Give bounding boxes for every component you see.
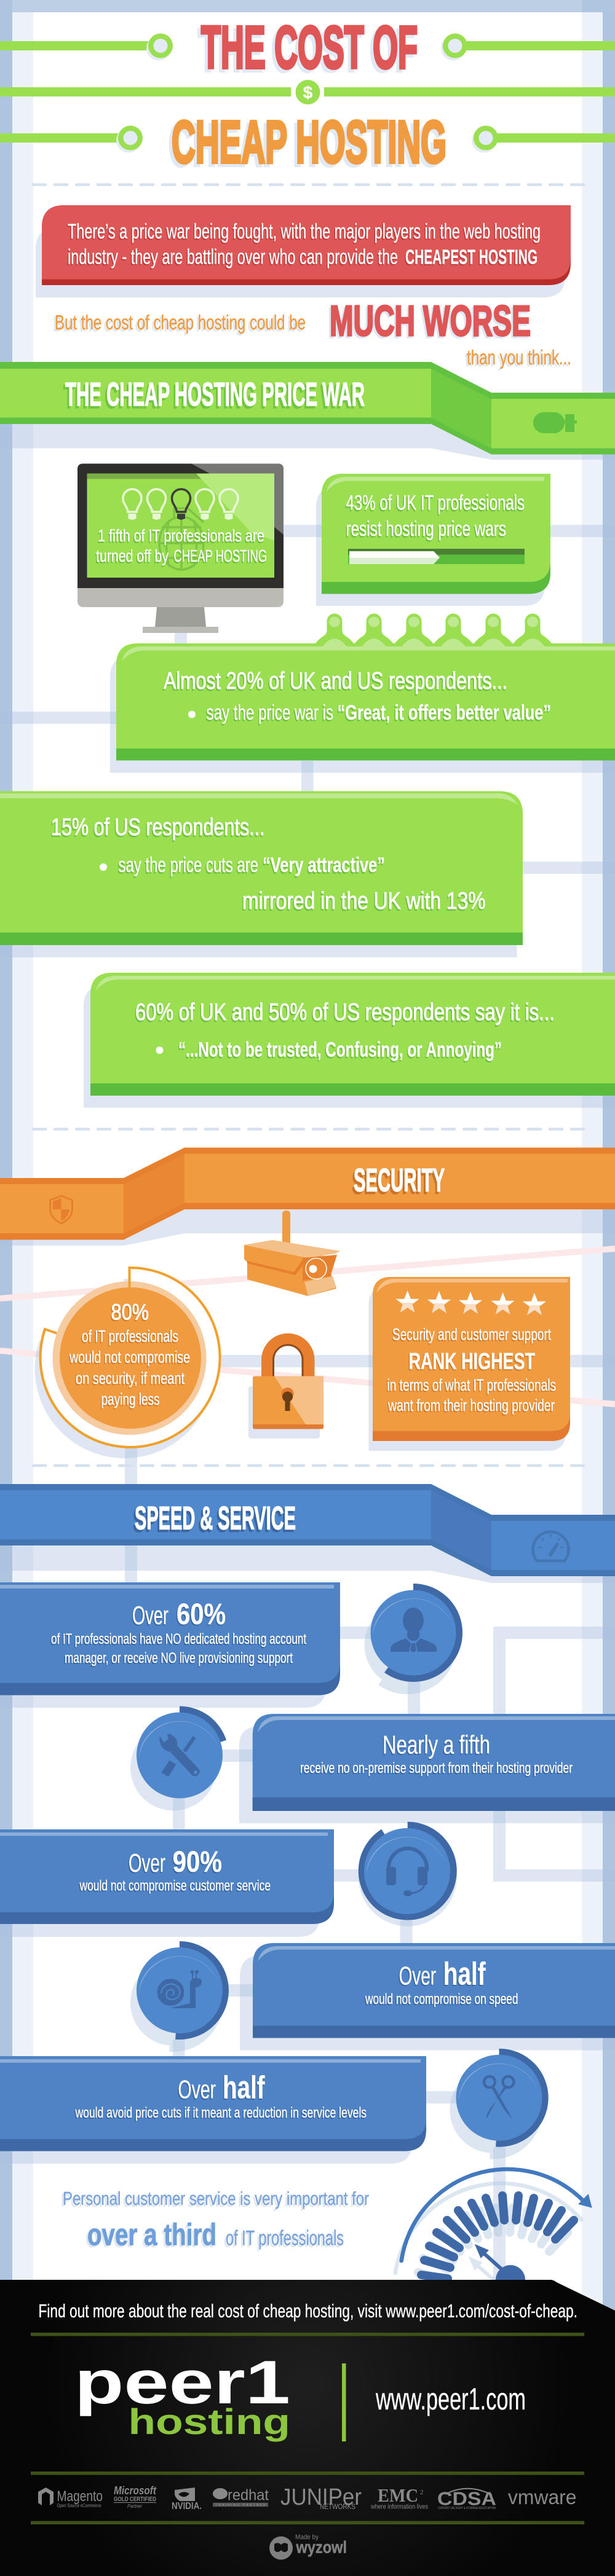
scissors symbol — [484, 2076, 514, 2119]
logo: red hat: redhat — [228, 2487, 269, 2504]
panel text: would avoid price cuts if it meant a reduction in service levels — [75, 2105, 367, 2121]
made by wyzowl — [269, 2534, 347, 2560]
partner logos — [38, 2484, 577, 2511]
panel: almost 20 percent — [110, 638, 615, 773]
icon badge: account manager — [364, 1584, 462, 1694]
panel text: “Very attractive” — [263, 854, 385, 877]
panel text: Over — [132, 1601, 169, 1630]
banner: the cheap hosting price war — [0, 362, 615, 460]
logo: microsoft gold certified: Partner — [127, 2503, 142, 2509]
background circuit lines — [0, 525, 615, 2280]
panel text: mirrored in the UK with 13% — [242, 888, 486, 914]
icon badge: snail — [130, 1941, 229, 2052]
large speed dial gauge — [395, 2169, 592, 2295]
laser beams — [0, 1249, 615, 1404]
intro text — [68, 220, 541, 269]
logo: red hat: TRAINING PARTNER — [215, 2503, 266, 2507]
panel: 15 percent of US respondents — [0, 791, 523, 957]
gauge arc with arrow — [402, 2169, 592, 2261]
panel text — [300, 1730, 573, 1777]
panel text: half — [223, 2070, 265, 2105]
dial text: on security, if meant — [76, 1369, 184, 1388]
logo: magento: Magento — [57, 2488, 103, 2505]
panel text: manager, or receive NO live provisioning support — [65, 1650, 293, 1667]
progress bar 43 percent — [348, 549, 525, 564]
panel text: would not compromise customer service — [79, 1878, 271, 1894]
gauge ticks — [421, 2196, 574, 2279]
gauge needle — [475, 2244, 525, 2295]
monitor screen — [87, 473, 274, 578]
panel text — [164, 668, 551, 724]
panel: over 60 percent — [0, 1582, 340, 1708]
panel: 43 percent resist price wars — [316, 474, 550, 606]
panel text — [51, 814, 486, 914]
intro text: industry - they are battling over who can provide the — [68, 246, 398, 269]
circle: 80 percent would not compromise — [35, 1268, 220, 1458]
dial text: paying less — [101, 1390, 160, 1408]
monitor: one fifth turned off by cheap hosting — [77, 463, 284, 633]
panel text: would not compromise on speed — [365, 1991, 518, 2008]
logo: peer1 hosting: peer1 — [74, 2348, 290, 2417]
panel text: Security and customer support — [392, 1325, 551, 1344]
crowd of people icons — [315, 613, 552, 644]
text: personal customer service — [63, 2188, 369, 2252]
icon: speedometer — [533, 1532, 568, 1561]
panel: over 90 percent — [0, 1829, 334, 1937]
text: but the cost could be much worse: than you think... — [467, 346, 571, 369]
dial text: would not compromise — [69, 1348, 190, 1367]
icon badge: scissors — [450, 2049, 549, 2159]
logo: nvidia — [172, 2488, 202, 2511]
title: the cost of cheap hosting — [0, 14, 615, 176]
panel text — [79, 1846, 271, 1894]
panel: security and support rank highest — [369, 1277, 570, 1451]
panel text — [51, 1598, 306, 1667]
text: but the cost could be much worse — [55, 297, 571, 369]
text: but the cost could be much worse: But the cost of cheap hosting could be — [55, 311, 306, 334]
panel text — [387, 1325, 556, 1415]
monitor text — [96, 526, 267, 565]
dial text — [69, 1299, 190, 1408]
footer url: www.peer1.com — [375, 2382, 526, 2416]
logo: microsoft gold certified: GOLD CERTIFIED — [114, 2496, 156, 2503]
dial ring — [41, 1268, 220, 1447]
icon: security camera — [244, 1211, 341, 1296]
footer — [0, 2280, 615, 2576]
panel: intro price war callout — [36, 205, 571, 297]
logo: juniper networks: NETWORKS — [320, 2502, 355, 2511]
banner heading: THE CHEAP HOSTING PRICE WAR — [65, 376, 365, 413]
monitor text: turned off by — [96, 546, 169, 565]
dial shadow — [35, 1279, 215, 1458]
panel text: of IT professionals have NO dedicated hosting account — [51, 1631, 306, 1647]
icon: shield — [50, 1196, 73, 1223]
snail symbol — [157, 1970, 202, 2008]
made by wyzowl: Made by — [295, 2534, 319, 2541]
panel text: RANK HIGHEST — [408, 1349, 535, 1375]
panel text: Almost 20% of UK and US respondents... — [164, 668, 507, 694]
title line one: THE COST OF — [201, 14, 418, 81]
logo: microsoft gold certified — [114, 2484, 157, 2509]
logo: peer1 hosting: hosting — [128, 2402, 290, 2442]
panel: 60 percent UK 50 percent US — [84, 973, 615, 1108]
panel text: Over — [399, 1961, 436, 1990]
panel text: Nearly a fifth — [383, 1730, 490, 1759]
panel text: say the price war is — [207, 701, 333, 724]
logo: magento — [38, 2488, 103, 2508]
panel text: 90% — [173, 1846, 222, 1879]
dial text: of IT professionals — [82, 1327, 178, 1346]
banner: security — [0, 1148, 615, 1246]
panel text: Over — [129, 1848, 165, 1877]
monitor body — [77, 463, 284, 607]
logo: nvidia: NVIDIA. — [172, 2501, 202, 2511]
icon: dollar coin: $ — [303, 83, 313, 102]
logo: emc: EMC — [378, 2484, 418, 2506]
logo: emc — [370, 2484, 428, 2510]
text: personal customer service: of IT professionals — [226, 2227, 344, 2250]
logo: vmware: vmware — [508, 2486, 577, 2508]
logo: peer1 hosting — [74, 2348, 290, 2442]
monitor text: CHEAP HOSTING — [173, 546, 267, 565]
panel text: 15% of US respondents... — [51, 814, 264, 841]
panel text: want from their hosting provider — [387, 1396, 555, 1415]
headset symbol — [386, 1848, 427, 1896]
panel: over half price cuts — [0, 2056, 426, 2164]
panel text — [135, 999, 555, 1062]
logo: emc: 2 — [420, 2489, 423, 2496]
lightbulbs — [123, 489, 238, 520]
text: personal customer service: over a third — [87, 2217, 216, 2252]
banner: speed and service — [0, 1484, 615, 1583]
logo: cdsa: CDSA — [437, 2488, 496, 2510]
five star rating — [396, 1290, 546, 1315]
dial text: 80% — [111, 1299, 149, 1325]
icon badge: headset — [359, 1822, 457, 1926]
watermark grenade — [159, 508, 204, 570]
panel text: say the price cuts are — [118, 854, 258, 877]
panel text: half — [443, 1957, 486, 1992]
icon badge: tools — [130, 1706, 226, 1810]
panel: 43 percent resist price wars: resist hosting price wars — [346, 517, 506, 541]
panel text — [75, 2070, 367, 2121]
monitor text: 1 fifth of IT professionals are — [98, 526, 264, 545]
icon: padlock — [248, 1333, 323, 1439]
logo: emc: where information lives — [370, 2503, 428, 2510]
logo: microsoft gold certified: Microsoft — [114, 2484, 157, 2497]
intro text: CHEAPEST HOSTING — [405, 246, 538, 268]
stat text: 43% of UK IT professionals — [346, 492, 525, 515]
banner heading: SECURITY — [354, 1163, 445, 1198]
icon: grenade — [533, 412, 577, 433]
monitor stand — [155, 607, 206, 627]
panel text: 60% — [177, 1598, 226, 1631]
panel: nearly a fifth — [239, 1714, 615, 1823]
logo: cdsa: CONTENT DELIVERY & STORAGE ASSOCIATION — [438, 2507, 496, 2510]
banner heading: SPEED & SERVICE — [135, 1501, 296, 1536]
panel: over half speed — [240, 1943, 615, 2050]
title connector lines — [0, 34, 615, 153]
logo: magento: Open Source eCommerce — [57, 2503, 101, 2508]
text: personal customer service: Personal customer service is very important for — [63, 2188, 369, 2209]
made by wyzowl: wyzowl — [296, 2538, 347, 2556]
logo: red hat — [213, 2487, 269, 2507]
logo: juniper networks: JUNIPer — [280, 2484, 362, 2510]
person silhouette — [391, 1608, 437, 1652]
panel text — [365, 1957, 518, 2008]
icon: dollar coin — [295, 80, 320, 104]
wrench and screwdriver — [160, 1734, 195, 1775]
gauge shadow — [395, 2183, 581, 2291]
panel text: Over — [178, 2075, 216, 2104]
